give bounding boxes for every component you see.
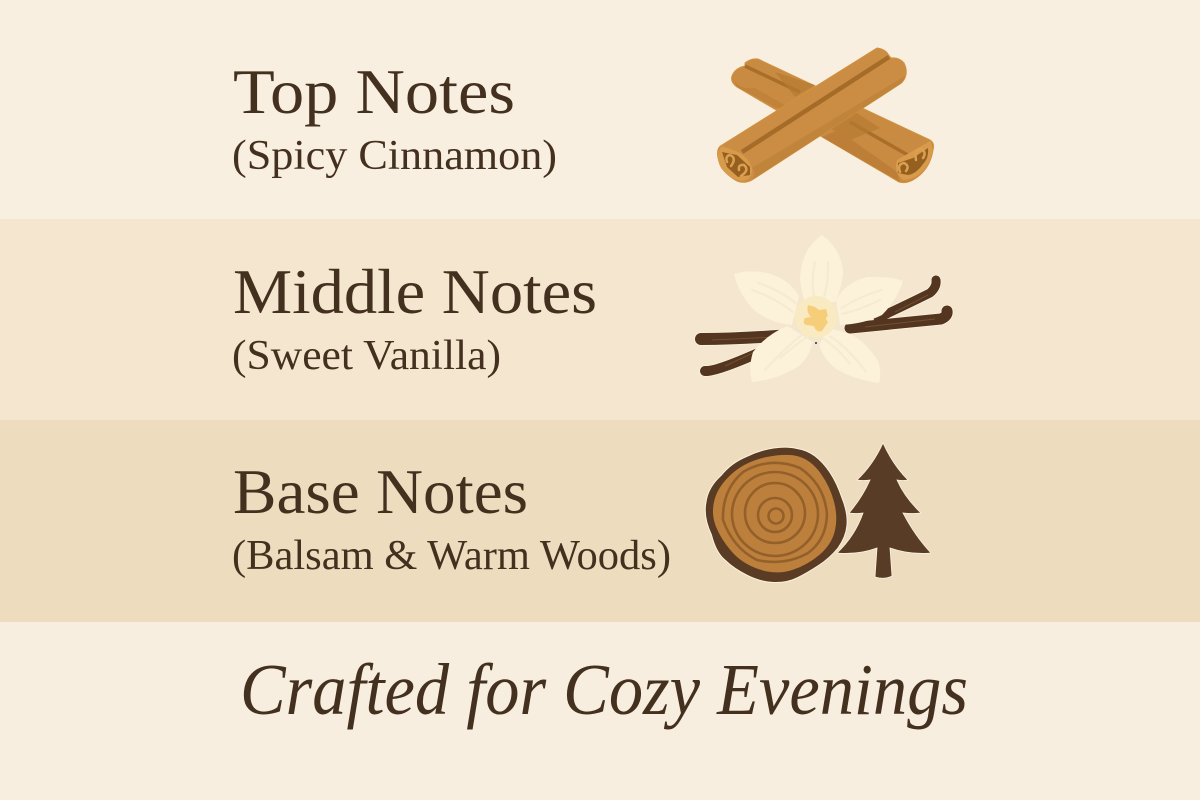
icon: wood log slice — [705, 447, 847, 583]
log inner wood — [715, 457, 834, 570]
heading: top notes: Top Notes — [233, 57, 515, 127]
log rings — [723, 463, 827, 562]
back cinnamon stick — [732, 59, 934, 183]
front cinnamon stick — [718, 48, 906, 182]
flower petals — [734, 235, 903, 383]
vanilla bean outlines — [701, 280, 947, 371]
subheading: spicy cinnamon: (Spicy Cinnamon) — [232, 133, 557, 179]
panel: base notes text — [232, 457, 671, 579]
band: middle notes background — [0, 219, 1200, 420]
flower stamen — [804, 305, 828, 331]
subheading: sweet vanilla: (Sweet Vanilla) — [232, 333, 501, 379]
panel: top notes text — [232, 57, 557, 179]
flower center — [795, 296, 837, 338]
icon: vanilla flower and beans — [701, 235, 947, 383]
band: footer background — [0, 622, 1200, 800]
petal veins — [752, 262, 882, 372]
heading: base notes: Base Notes — [233, 457, 528, 527]
icon: pine tree — [837, 443, 931, 578]
small dot — [815, 342, 817, 344]
front stick end spiral — [718, 146, 752, 181]
bean highlights — [712, 295, 935, 366]
footer tagline: Crafted for Cozy Evenings — [240, 649, 968, 730]
vanilla beans — [701, 280, 947, 371]
subheading: balsam and warm woods: (Balsam & Warm Woods) — [232, 533, 671, 579]
band: top notes background — [0, 0, 1200, 219]
heading: middle notes: Middle Notes — [233, 257, 597, 327]
panel: middle notes text — [232, 257, 597, 379]
icon: crossed cinnamon sticks — [718, 48, 934, 183]
band: base notes background — [0, 420, 1200, 622]
back stick end spiral — [896, 141, 932, 180]
log bark — [705, 447, 847, 583]
